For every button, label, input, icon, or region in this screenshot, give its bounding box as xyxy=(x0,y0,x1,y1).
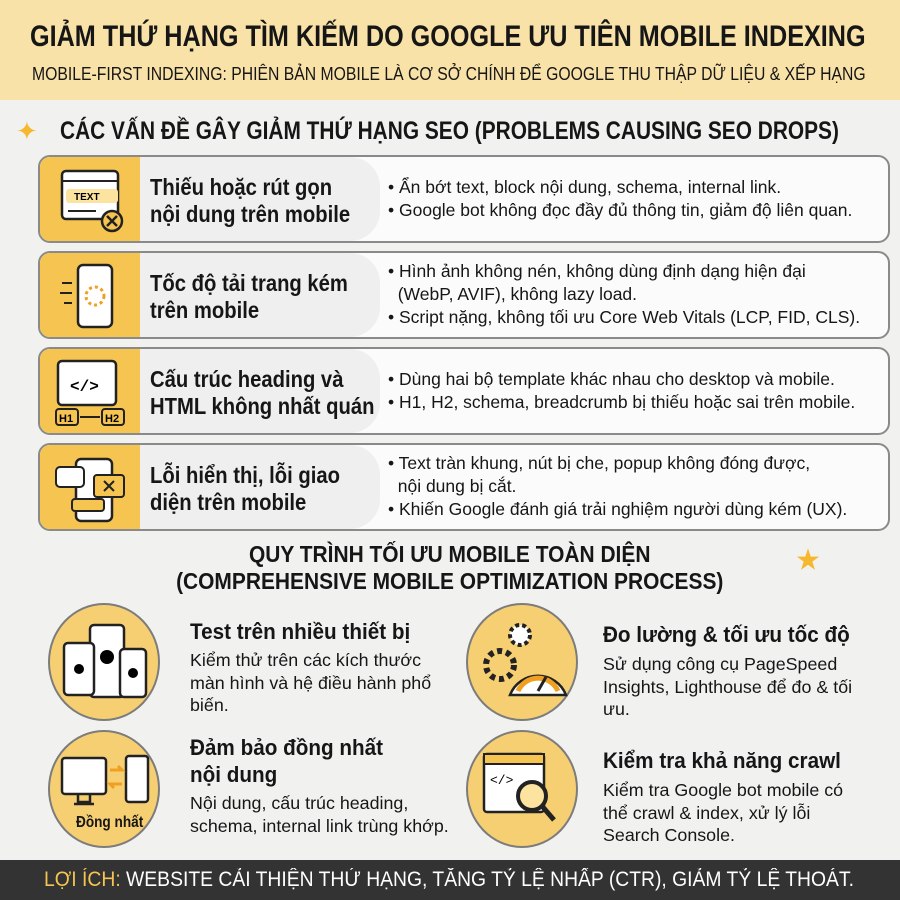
bullets: • Ẩn bớt text, block nội dung, schema, internal link. xyxy=(388,177,781,197)
step: crawl xyxy=(466,730,843,848)
step title: Đo lường & tối ưu tốc độ xyxy=(603,622,850,647)
icon: gauge circle xyxy=(466,603,578,721)
problem title xyxy=(150,174,350,227)
step text: Nội dung, cấu trúc heading, xyxy=(190,793,408,813)
problem title: HTML không nhất quán xyxy=(150,393,374,419)
icon: magnifier circle: </> xyxy=(490,773,514,788)
step: consistency xyxy=(48,730,449,848)
bullets: • H1, H2, schema, breadcrumb bị thiếu hoặc sai trên mobile. xyxy=(388,392,855,412)
problem title xyxy=(150,270,348,323)
icon: star: ★ xyxy=(796,547,820,574)
step text: ưu. xyxy=(603,699,630,719)
panel: problem 4 xyxy=(38,443,890,531)
title: GIẢM THỨ HẠNG TÌM KIẾM DO GOOGLE ƯU TIÊN MOBILE INDEXING xyxy=(30,20,866,53)
icon: code H1 H2: </> xyxy=(70,378,99,396)
bullets: • Hình ảnh không nén, không dùng định dạng hiện đại xyxy=(388,261,806,281)
icon: sync circle xyxy=(48,730,160,848)
section heading: process xyxy=(176,541,724,594)
step title: Test trên nhiều thiết bị xyxy=(190,619,410,644)
step text: schema, internal link trùng khớp. xyxy=(190,816,449,836)
bullets: nội dung bị cắt. xyxy=(398,476,516,496)
step title xyxy=(190,735,383,787)
section heading: process: (COMPREHENSIVE MOBILE OPTIMIZATION PROCESS) xyxy=(176,568,724,594)
footer text: LỢI ÍCH: WEBSITE CẢI THIỆN THỨ HẠNG, TĂNG TỶ LỆ NHẤP (CTR), GIẢM TỶ LỆ THOÁT. xyxy=(44,868,854,891)
icon: chat phone xyxy=(55,458,125,522)
icon: magnifier circle xyxy=(466,730,578,848)
bullets: • Google bot không đọc đầy đủ thông tin, giảm độ liên quan. xyxy=(388,200,852,220)
step text xyxy=(603,654,852,719)
step: test devices xyxy=(48,603,431,721)
icon: devices circle xyxy=(48,603,160,721)
icon: code H1 H2: H2 xyxy=(105,413,119,425)
panel: problem 2 xyxy=(38,251,890,339)
bullets xyxy=(388,369,855,412)
header band xyxy=(0,0,900,100)
step text xyxy=(603,780,843,845)
problem title xyxy=(150,366,374,419)
step text: biến. xyxy=(190,695,229,715)
subtitle: MOBILE-FIRST INDEXING: PHIÊN BẢN MOBILE LÀ CƠ SỞ CHÍNH ĐỂ GOOGLE THU THẬP DỮ LIỆU & XẾP HẠNG xyxy=(32,64,866,84)
bullets xyxy=(388,261,860,327)
icon: text box xyxy=(60,170,124,232)
step text: Kiểm tra Google bot mobile có xyxy=(603,780,843,800)
step text: thể crawl & index, xử lý lỗi xyxy=(603,802,810,822)
section heading: process: QUY TRÌNH TỐI ƯU MOBILE TOÀN DIỆN xyxy=(249,541,651,567)
problem title: Tốc độ tải trang kém xyxy=(150,270,348,296)
step text xyxy=(190,650,431,715)
step: speed xyxy=(466,603,852,721)
problem title: Thiếu hoặc rút gọn xyxy=(150,174,332,200)
step title: nội dung xyxy=(190,762,277,787)
step text: Search Console. xyxy=(603,825,735,845)
step text: Sử dụng công cụ PageSpeed xyxy=(603,654,837,674)
step text: Insights, Lighthouse để đo & tối xyxy=(603,676,852,696)
problem title xyxy=(150,462,340,515)
icon: sparkle: ✦ xyxy=(16,116,38,146)
icon: sync circle: Đồng nhất xyxy=(76,814,143,831)
panel: problem 1 xyxy=(38,155,890,243)
panel: problem 3 xyxy=(38,347,890,435)
icon: text box: TEXT xyxy=(74,192,100,203)
problem title: Lỗi hiển thị, lỗi giao xyxy=(150,462,340,488)
bullets: • Text tràn khung, nút bị che, popup không đóng được, xyxy=(388,453,810,473)
step title: Đảm bảo đồng nhất xyxy=(190,735,383,760)
footer banner xyxy=(0,860,900,900)
step title: Kiểm tra khả năng crawl xyxy=(603,748,841,773)
problem title: Cấu trúc heading và xyxy=(150,366,343,392)
section heading: problems: CÁC VẤN ĐỀ GÂY GIẢM THỨ HẠNG SEO (PROBLEMS CAUSING SEO DROPS) xyxy=(60,117,839,145)
bullets: • Dùng hai bộ template khác nhau cho desktop và mobile. xyxy=(388,369,835,389)
bullets xyxy=(388,177,852,220)
bullets: • Script nặng, không tối ưu Core Web Vitals (LCP, FID, CLS). xyxy=(388,307,860,327)
icon: code H1 H2: H1 xyxy=(59,413,73,425)
bullets: • Khiến Google đánh giá trải nghiệm người dùng kém (UX). xyxy=(388,499,847,519)
problem title: diện trên mobile xyxy=(150,489,306,515)
problem title: trên mobile xyxy=(150,297,259,323)
step text: màn hình và hệ điều hành phổ xyxy=(190,672,431,692)
step text: Kiểm thử trên các kích thước xyxy=(190,650,421,670)
bullets xyxy=(388,453,847,519)
problem title: nội dung trên mobile xyxy=(150,201,350,227)
bullets: (WebP, AVIF), không lazy load. xyxy=(398,284,637,304)
step text xyxy=(190,793,449,836)
icon: loading phone xyxy=(60,264,114,328)
icon: code H1 H2 xyxy=(55,360,125,426)
